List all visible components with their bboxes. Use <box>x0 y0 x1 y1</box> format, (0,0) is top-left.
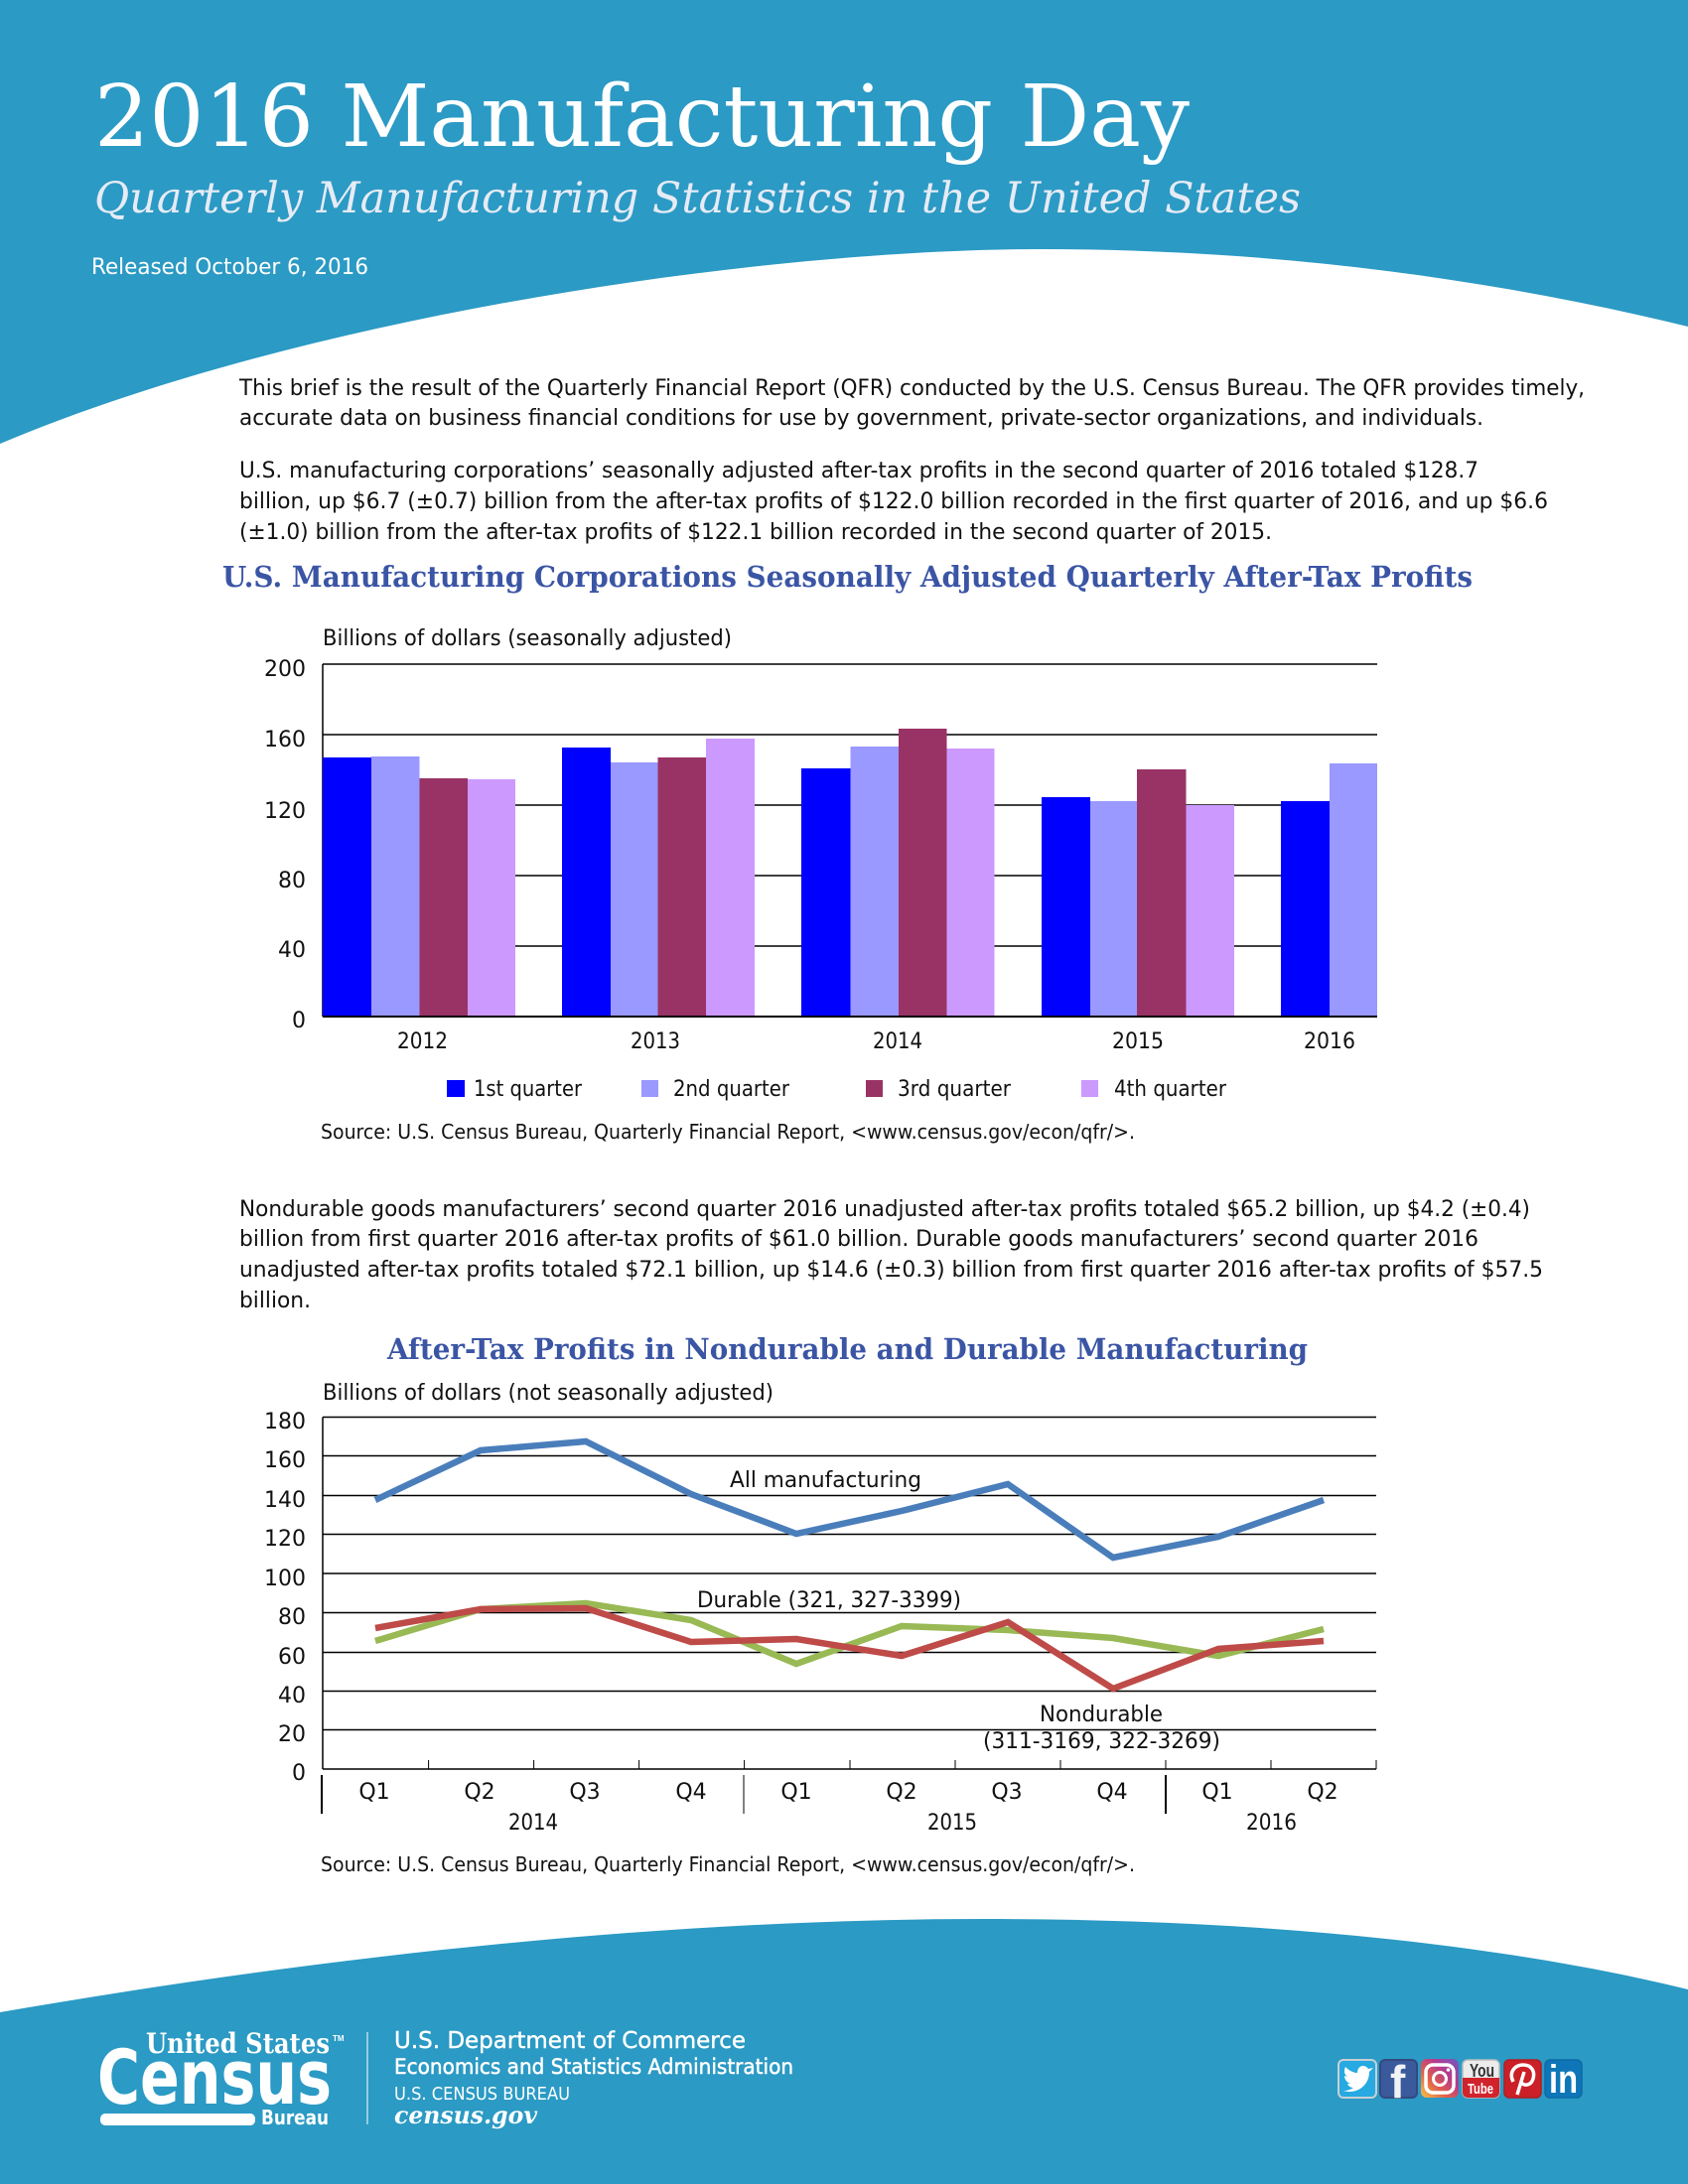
bar chart legend: 4th quarter <box>1114 1077 1227 1102</box>
line chart y axis labels: 140 <box>264 1488 306 1513</box>
department text: U.S. CENSUS BUREAU <box>394 2084 570 2105</box>
line: all manufacturing <box>375 1441 1324 1558</box>
line chart y axis labels: 160 <box>264 1448 306 1473</box>
line chart quarter labels: Q3 <box>569 1780 601 1805</box>
bar chart x axis labels <box>397 1029 1355 1054</box>
durable and nondurable paragraph <box>239 1197 1543 1313</box>
bar chart y axis labels: 200 <box>264 657 306 682</box>
profits paragraph: (±1.0) billion from the after-tax profits of $122.1 billion recorded in the second quarter of 2015. <box>239 520 1272 545</box>
bar chart legend: 3rd quarter <box>898 1077 1012 1102</box>
line chart year labels: 2016 <box>1246 1811 1297 1836</box>
line chart quarter labels: Q3 <box>991 1780 1023 1805</box>
census logo: Bureau <box>261 2106 329 2129</box>
durable and nondurable paragraph: billion. <box>239 1289 311 1313</box>
label: all manufacturing: All manufacturing <box>730 1468 921 1493</box>
bar chart legend: 2nd quarter <box>673 1077 790 1102</box>
label: nondurable <box>983 1703 1220 1754</box>
line chart quarter labels: Q2 <box>886 1780 917 1805</box>
label: nondurable: Nondurable <box>1040 1703 1163 1727</box>
bar chart source: Source: U.S. Census Bureau, Quarterly Financial Report, <www.census.gov/econ/qfr/>. <box>321 1120 1135 1144</box>
line chart quarter labels: Q1 <box>358 1780 390 1805</box>
icon: youtube <box>1463 2060 1499 2098</box>
line chart quarter labels: Q4 <box>1096 1780 1128 1805</box>
line chart y axis labels: 60 <box>278 1645 306 1670</box>
census logo: Census <box>97 2033 332 2121</box>
bars 2014 <box>801 729 995 1017</box>
line chart y axis labels: 180 <box>264 1410 306 1434</box>
bar chart y axis labels: 160 <box>264 728 306 752</box>
line chart y axis labels <box>264 1410 306 1786</box>
bar chart x axis labels: 2016 <box>1304 1029 1355 1054</box>
title: 2016 Manufacturing Day <box>94 68 1190 167</box>
durable and nondurable paragraph: Nondurable goods manufacturers’ second quarter 2016 unadjusted after-tax profits totaled $65.2 billion, up $4.2 (±0.4) <box>239 1197 1530 1222</box>
icon: youtube: You <box>1470 2061 1494 2081</box>
bar chart legend <box>447 1077 1227 1102</box>
heading: line chart: After-Tax Profits in Nondurable and Durable Manufacturing <box>386 1332 1308 1366</box>
line chart quarter labels <box>358 1780 1338 1805</box>
intro paragraph <box>238 376 1585 431</box>
line chart year labels <box>508 1811 1297 1836</box>
profits paragraph: U.S. manufacturing corporations’ seasonally adjusted after-tax profits in the second quarter of 2016 totaled $128.7 <box>239 459 1478 483</box>
bar chart y axis labels: 0 <box>292 1009 306 1033</box>
icon: linkedin: in <box>1549 2058 1578 2102</box>
icon: facebook <box>1380 2056 1417 2108</box>
durable and nondurable paragraph: billion from first quarter 2016 after-tax profits of $61.0 billion. Durable goods manufacturers’ second quarter 2016 <box>239 1227 1478 1252</box>
heading: bar chart: U.S. Manufacturing Corporations Seasonally Adjusted Quarterly After-Tax Profits <box>222 560 1473 594</box>
icon: facebook: f <box>1390 2056 1406 2108</box>
department text: Economics and Statistics Administration <box>394 2055 793 2079</box>
line chart y axis labels: 80 <box>278 1605 306 1630</box>
line: durable <box>375 1603 1324 1664</box>
label: nondurable: (311-3169, 322-3269) <box>983 1729 1220 1754</box>
durable and nondurable paragraph: unadjusted after-tax profits totaled $72.1 billion, up $14.6 (±0.3) billion from first quarter 2016 after-tax profits of $57.5 <box>239 1258 1543 1283</box>
social media icons <box>1338 2056 1582 2108</box>
bar chart y axis labels: 120 <box>264 799 306 824</box>
census logo: United States <box>146 2027 330 2060</box>
intro paragraph: accurate data on business financial conditions for use by government, private-sector organizations, and individuals. <box>239 406 1483 431</box>
bar chart: after-tax profits <box>264 626 1377 1102</box>
bars 2015 <box>1042 769 1234 1017</box>
department text: census.gov <box>394 2101 538 2129</box>
icon: youtube: Tube <box>1468 2081 1493 2098</box>
line chart source: Source: U.S. Census Bureau, Quarterly Financial Report, <www.census.gov/econ/qfr/>. <box>321 1852 1135 1876</box>
census logo: TM <box>333 2034 345 2043</box>
intro paragraph: This brief is the result of the Quarterly Financial Report (QFR) conducted by the U.S. Census Bureau. The QFR provides timely, <box>238 376 1585 401</box>
release date: Released October 6, 2016 <box>91 255 368 280</box>
icon: pinterest <box>1504 2060 1541 2098</box>
bar chart x axis labels: 2013 <box>631 1029 680 1054</box>
bars 2016 <box>1281 763 1377 1017</box>
bar chart x axis labels: 2012 <box>397 1029 448 1054</box>
label: durable: Durable (321, 327-3399) <box>697 1588 961 1613</box>
department text: U.S. Department of Commerce <box>394 2028 746 2054</box>
bars 2012 <box>323 756 515 1017</box>
line chart quarter labels: Q2 <box>464 1780 495 1805</box>
line chart y axis labels: 0 <box>292 1761 306 1786</box>
bar chart y axis labels <box>264 657 306 1033</box>
line chart y axis labels: 100 <box>264 1567 306 1591</box>
bar chart unit label: Billions of dollars (seasonally adjusted) <box>323 626 732 651</box>
bar chart x axis labels: 2015 <box>1112 1029 1164 1054</box>
line chart quarter labels: Q2 <box>1307 1780 1338 1805</box>
line chart year labels: 2014 <box>508 1811 558 1836</box>
line chart y axis labels: 40 <box>278 1684 306 1708</box>
line chart quarter labels: Q1 <box>780 1780 812 1805</box>
bar chart x axis labels: 2014 <box>873 1029 922 1054</box>
bar chart legend: 1st quarter <box>474 1077 583 1102</box>
subtitle: Quarterly Manufacturing Statistics in the United States <box>94 174 1301 223</box>
line chart y axis labels: 20 <box>278 1722 306 1747</box>
bars 2013 <box>562 739 755 1017</box>
line: nondurable <box>375 1608 1324 1689</box>
profits paragraph: billion, up $6.7 (±0.7) billion from the after-tax profits of $122.0 billion recorded in the first quarter of 2016, and up $6.6 <box>239 489 1548 514</box>
bar chart y axis labels: 40 <box>278 938 306 963</box>
line chart: nondurable and durable profits <box>264 1381 1376 1836</box>
icon: twitter <box>1338 2060 1376 2098</box>
line chart y axis labels: 120 <box>264 1527 306 1552</box>
line chart unit label: Billions of dollars (not seasonally adjusted) <box>323 1381 774 1406</box>
line chart year labels: 2015 <box>927 1811 977 1836</box>
bar chart y axis labels: 80 <box>278 869 306 893</box>
icon: instagram <box>1421 2059 1459 2098</box>
department text <box>394 2028 793 2129</box>
header band <box>0 0 1688 444</box>
footer band <box>0 1919 1688 2184</box>
line chart quarter labels: Q4 <box>675 1780 707 1805</box>
line chart quarter labels: Q1 <box>1201 1780 1233 1805</box>
profits paragraph <box>239 459 1548 545</box>
